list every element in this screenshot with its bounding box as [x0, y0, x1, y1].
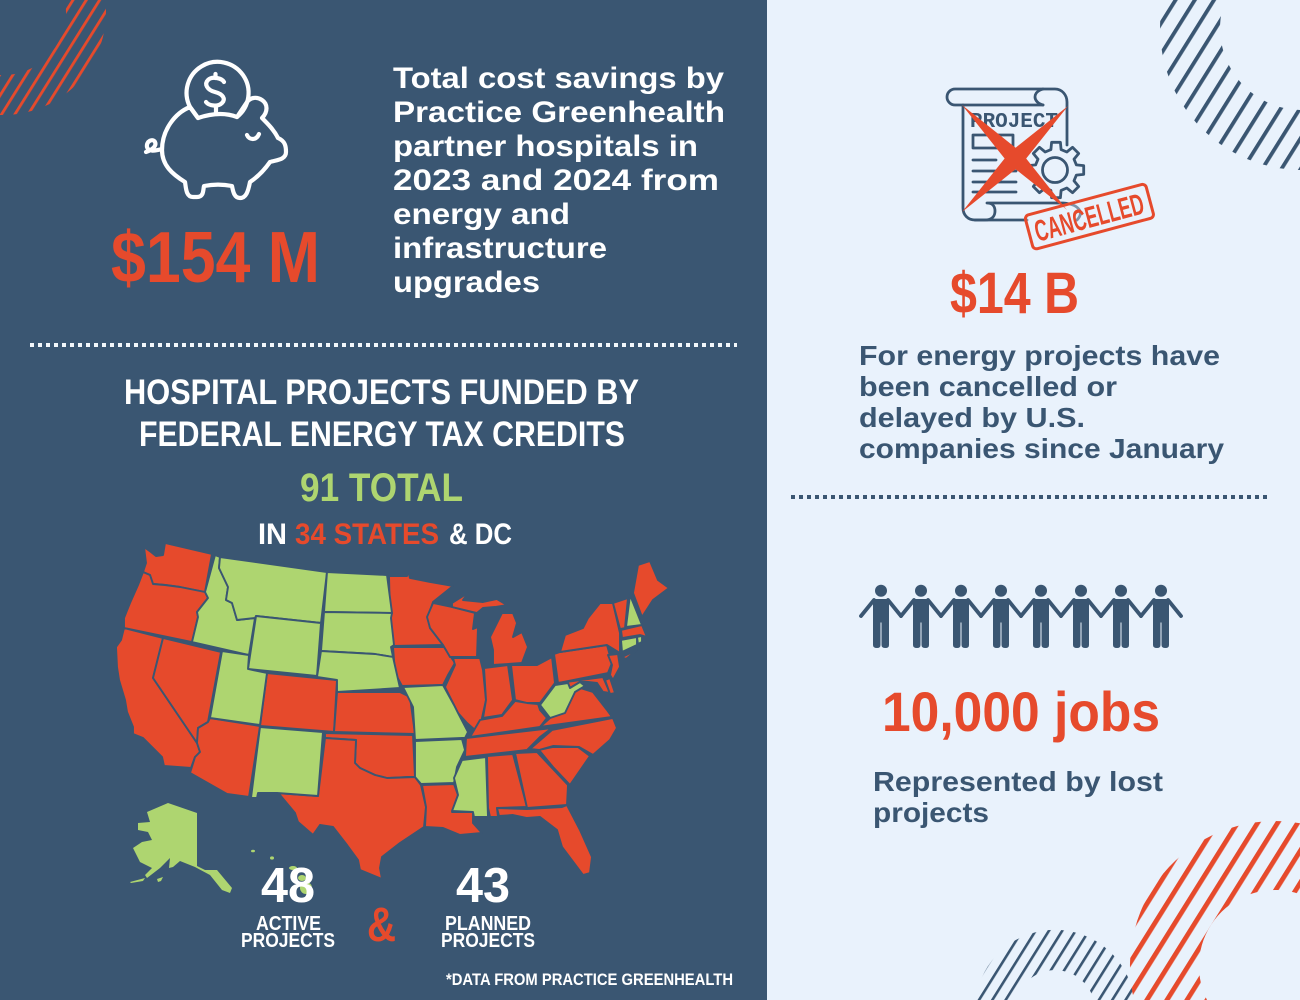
- stat: 91 total: 91 TOTAL: [300, 466, 463, 510]
- text block: total cost savings description: 2023 and 2024 from: [393, 164, 719, 197]
- stat: 48 active projects: 48: [261, 859, 315, 913]
- icon: cancelled project scroll: CANCELLED: [1031, 188, 1148, 249]
- text block: total cost savings description: partner hospitals in: [393, 130, 698, 163]
- subheading: in 34 states and DC: 34 STATES: [295, 518, 439, 551]
- heading: hospital projects funded: HOSPITAL PROJECTS FUNDED BY: [124, 373, 639, 412]
- stat: 43 planned projects: PLANNED: [445, 913, 531, 935]
- icon: cancelled project scroll: [947, 89, 1154, 250]
- heading: hospital projects funded: [124, 373, 639, 454]
- stat: 48 active projects: PROJECTS: [241, 930, 335, 952]
- decorative hatched ring: bottom right orange: [1130, 821, 1300, 1000]
- icon: piggy bank with coin: [146, 62, 286, 198]
- text block: energy projects cancelled: For energy projects have: [859, 340, 1220, 371]
- text block: represented by lost projects: projects: [873, 797, 989, 828]
- stat: 43 planned projects: [441, 859, 535, 952]
- subheading: in 34 states and DC: & DC: [449, 518, 512, 551]
- decorative hatched ring: bottom blue: [976, 930, 1134, 1000]
- ampersand: &: [367, 899, 396, 952]
- icon: cancelled project scroll: PROJECT: [970, 111, 1058, 134]
- text block: total cost savings description: Practice Greenhealth: [393, 96, 725, 129]
- text block: total cost savings description: upgrades: [393, 266, 540, 299]
- stat: 10,000 jobs: 10,000 jobs: [882, 680, 1160, 743]
- text block: represented by lost projects: Represented by lost: [873, 766, 1163, 797]
- stat: 48 active projects: [241, 859, 335, 952]
- stat: 48 active projects: ACTIVE: [256, 913, 321, 935]
- stat: 43 planned projects: PROJECTS: [441, 930, 535, 952]
- map: Alaska and Hawaii: [130, 803, 312, 894]
- text block: energy projects cancelled: companies since January: [859, 433, 1224, 464]
- stat: 43 planned projects: 43: [456, 859, 510, 913]
- text block: total cost savings description: energy and: [393, 198, 570, 231]
- source note: *DATA FROM PRACTICE GREENHEALTH: [446, 971, 733, 989]
- panel: dark left background: [0, 0, 767, 1000]
- text block: energy projects cancelled: been cancelled or: [859, 371, 1117, 402]
- subheading: in 34 states and DC: IN: [258, 518, 287, 551]
- text block: total cost savings description: infrastructure: [393, 232, 607, 265]
- stat: $154 M: $154 M: [111, 218, 320, 298]
- text block: total cost savings description: [393, 62, 725, 299]
- text block: energy projects cancelled: delayed by U.S.: [859, 402, 1085, 433]
- decorative hatched ring: top right: [1160, 0, 1300, 170]
- subheading: in 34 states and DC: [258, 518, 512, 551]
- decorative hatched ring: top left: [0, 0, 106, 115]
- heading: hospital projects funded: FEDERAL ENERGY TAX CREDITS: [139, 415, 625, 454]
- text block: total cost savings description: Total cost savings by: [393, 62, 724, 95]
- icon: row of people holding hands: [861, 585, 1181, 648]
- text block: energy projects cancelled: [859, 340, 1224, 464]
- text block: represented by lost projects: [873, 766, 1163, 828]
- stat: $14 B: $14 B: [950, 261, 1079, 326]
- panel: light right background: [767, 0, 1300, 1000]
- map: United States by state: [116, 543, 669, 894]
